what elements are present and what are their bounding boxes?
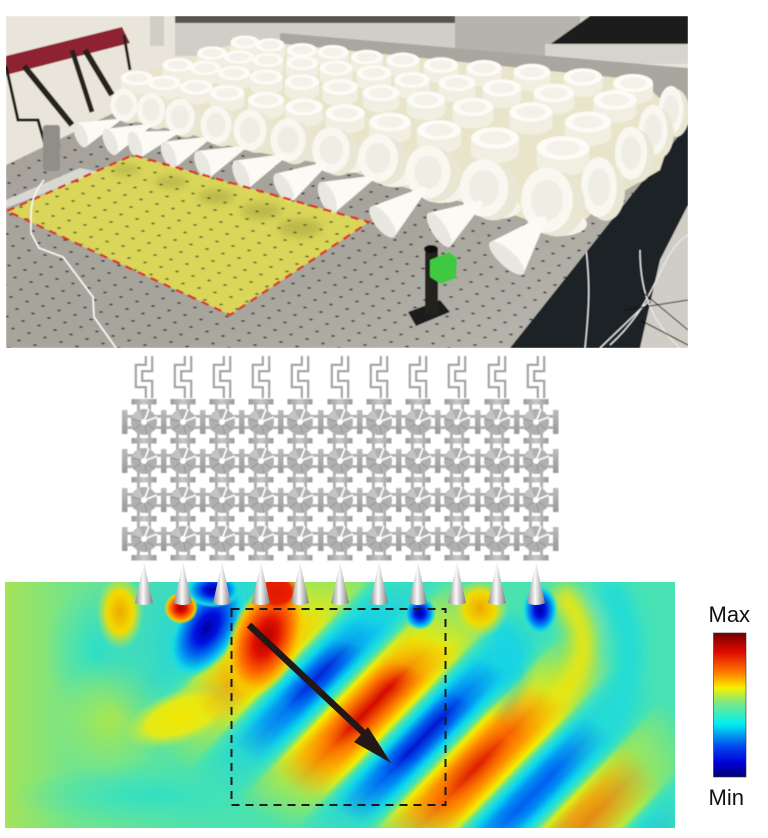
photo: experimental setup [6,16,689,348]
bottom caps [330,157,587,236]
feed wires [139,356,541,398]
dashed observation box [232,609,446,805]
unit cells, rows 1 to 4 [122,399,558,560]
arrow: beam direction [249,625,391,763]
optical table [6,113,688,348]
acoustic pressure field map [5,582,675,828]
white cable [31,180,116,348]
red rack with black straps [6,27,130,155]
side disks [110,86,689,236]
colour bar [714,633,746,777]
horn cones on field [135,562,545,605]
colour scale legend [708,602,750,810]
cap cylinders [121,36,653,176]
microphone on post with green block [408,245,457,326]
table base and floor [510,124,688,348]
schematic: metamaterial unit cell array [122,356,558,560]
label: Max: Max [708,602,750,627]
background wall and cabinets [6,16,688,165]
metasurface module array [71,36,689,279]
label: Min: Min [708,785,744,810]
highlighted yellow test area [7,155,369,315]
horn cones [74,118,546,276]
metal post [43,125,60,171]
cone shadows on test area [111,165,322,237]
